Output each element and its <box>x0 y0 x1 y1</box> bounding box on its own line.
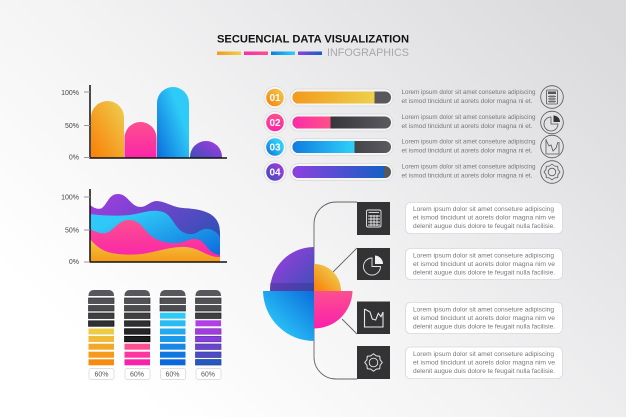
pie segment: yellow <box>314 264 341 291</box>
text box 2: et ismod tincidunt ut aorets dolor magna nim ve <box>413 261 556 268</box>
bar chart axis labels: 50% <box>65 123 79 130</box>
text box 3: et ismod tincidunt ut aorets dolor magna nim ve <box>413 315 556 322</box>
area layer: orange <box>90 239 220 262</box>
text box 1: Lorem ipsum dolor sit amet conseture adipiscing <box>413 206 555 213</box>
column 3: 60% <box>165 371 180 378</box>
icon tile: line chart <box>357 302 390 334</box>
pie segment: blue <box>263 291 314 341</box>
icon tile: calculator <box>357 202 390 235</box>
text box 2: delenit augue duis dolore te feugait nulla facilisie. <box>413 270 555 276</box>
text box 3: Lorem ipsum dolor sit amet conseture adipiscing <box>413 306 555 314</box>
text 01: et ismod tincidunt ut aorets dolor magna ni et. <box>402 98 533 105</box>
progress row 02 <box>264 111 563 134</box>
progress bar 03 <box>290 138 393 156</box>
tree connector lines <box>314 202 357 379</box>
semi-circle pie chart <box>263 247 352 341</box>
bar chart <box>61 85 227 162</box>
column 4: 60% <box>201 371 215 378</box>
icon: calculator in circle <box>541 86 563 108</box>
icon tile: gear <box>357 346 390 379</box>
pie segment: purple <box>270 247 314 291</box>
number badge 03: 03 <box>269 142 281 154</box>
icon: line chart in circle <box>541 135 563 158</box>
text 02 <box>402 114 536 130</box>
area layer: blue <box>90 211 220 262</box>
bar 1 <box>91 101 124 158</box>
text box 2 <box>406 248 562 280</box>
progress row 03 <box>264 135 563 158</box>
text 04: Lorem ipsum dolor sit amet conseture adipiscing <box>402 164 536 170</box>
icon: gear in circle <box>541 161 563 183</box>
area chart axis labels: 50% <box>65 228 79 234</box>
number badge 01: 01 <box>269 93 281 104</box>
text box 4: Lorem ipsum dolor sit amet conseture adipiscing <box>413 351 555 358</box>
icon: pie chart in circle <box>541 111 563 134</box>
area layer: pink <box>90 220 220 262</box>
text box 1: delenit augue duis dolore te feugait nulla facilisie. <box>413 223 555 230</box>
column 2: 60% <box>130 371 144 378</box>
area chart axis labels <box>61 194 90 266</box>
number badge 04: 04 <box>269 168 281 178</box>
number badge 02: 02 <box>269 118 281 129</box>
text 04: et ismod tincidunt ut aorets dolor magna ni et. <box>402 172 533 180</box>
text 01 <box>402 89 536 105</box>
number badge 04 <box>264 161 286 183</box>
area chart axis labels: 0% <box>69 259 79 266</box>
bar chart axis labels: 0% <box>69 154 79 162</box>
progress row 04 <box>264 161 563 183</box>
text box 4: delenit augue duis dolore te feugait nulla facilisie. <box>413 368 555 375</box>
text box 1 <box>406 202 562 234</box>
bar chart axis labels: 100% <box>61 90 79 97</box>
title colour bars <box>217 52 322 55</box>
pie shadow band <box>270 283 314 291</box>
stacked level columns <box>88 290 221 380</box>
bar chart axis labels <box>61 90 90 162</box>
text box 4 <box>406 347 562 378</box>
number badge 02 <box>264 112 286 134</box>
text 04 <box>402 164 536 180</box>
bar 4 <box>190 141 222 158</box>
column 1: 60% <box>94 371 109 378</box>
progress row 01 <box>264 86 563 108</box>
text box 3 <box>406 302 562 334</box>
text 02: et ismod tincidunt ut aorets dolor magna ni et. <box>402 123 533 130</box>
progress bar 02 <box>290 114 393 131</box>
text 03: Lorem ipsum dolor sit amet conseture adipiscing <box>402 138 536 146</box>
bar 2 <box>124 122 156 158</box>
area layer: purple <box>90 194 220 262</box>
title: SECUENCIAL DATA VISUALIZATION <box>217 34 409 46</box>
subtitle: INFOGRAPHICS <box>327 47 409 59</box>
text 03: et ismod tincidunt ut aorets dolor magna ni et. <box>402 148 533 154</box>
progress bar 04 <box>290 164 393 180</box>
text box 1: et ismod tincidunt ut aorets dolor magna nim ve <box>413 214 556 222</box>
area chart axis labels: 100% <box>61 194 79 201</box>
area chart <box>61 189 227 266</box>
text 02: Lorem ipsum dolor sit amet conseture adipiscing <box>402 114 536 121</box>
number badge 03 <box>264 136 286 158</box>
progress bar 01 <box>290 89 393 106</box>
bar chart axes <box>90 85 227 158</box>
pie segment: pink <box>314 291 352 328</box>
text 01: Lorem ipsum dolor sit amet conseture adipiscing <box>402 89 536 96</box>
icon tile: pie chart <box>357 248 390 280</box>
text 03 <box>402 138 536 154</box>
number badge 01 <box>264 86 286 108</box>
area chart axes <box>90 189 227 262</box>
bar 3 <box>157 87 189 158</box>
text box 4: et ismod tincidunt ut aorets dolor magna nim ve <box>413 360 556 366</box>
text box 2: Lorem ipsum dolor sit amet conseture adipiscing <box>413 252 555 260</box>
text box 3: delenit augue duis dolore te feugait nulla facilisie. <box>413 324 555 330</box>
